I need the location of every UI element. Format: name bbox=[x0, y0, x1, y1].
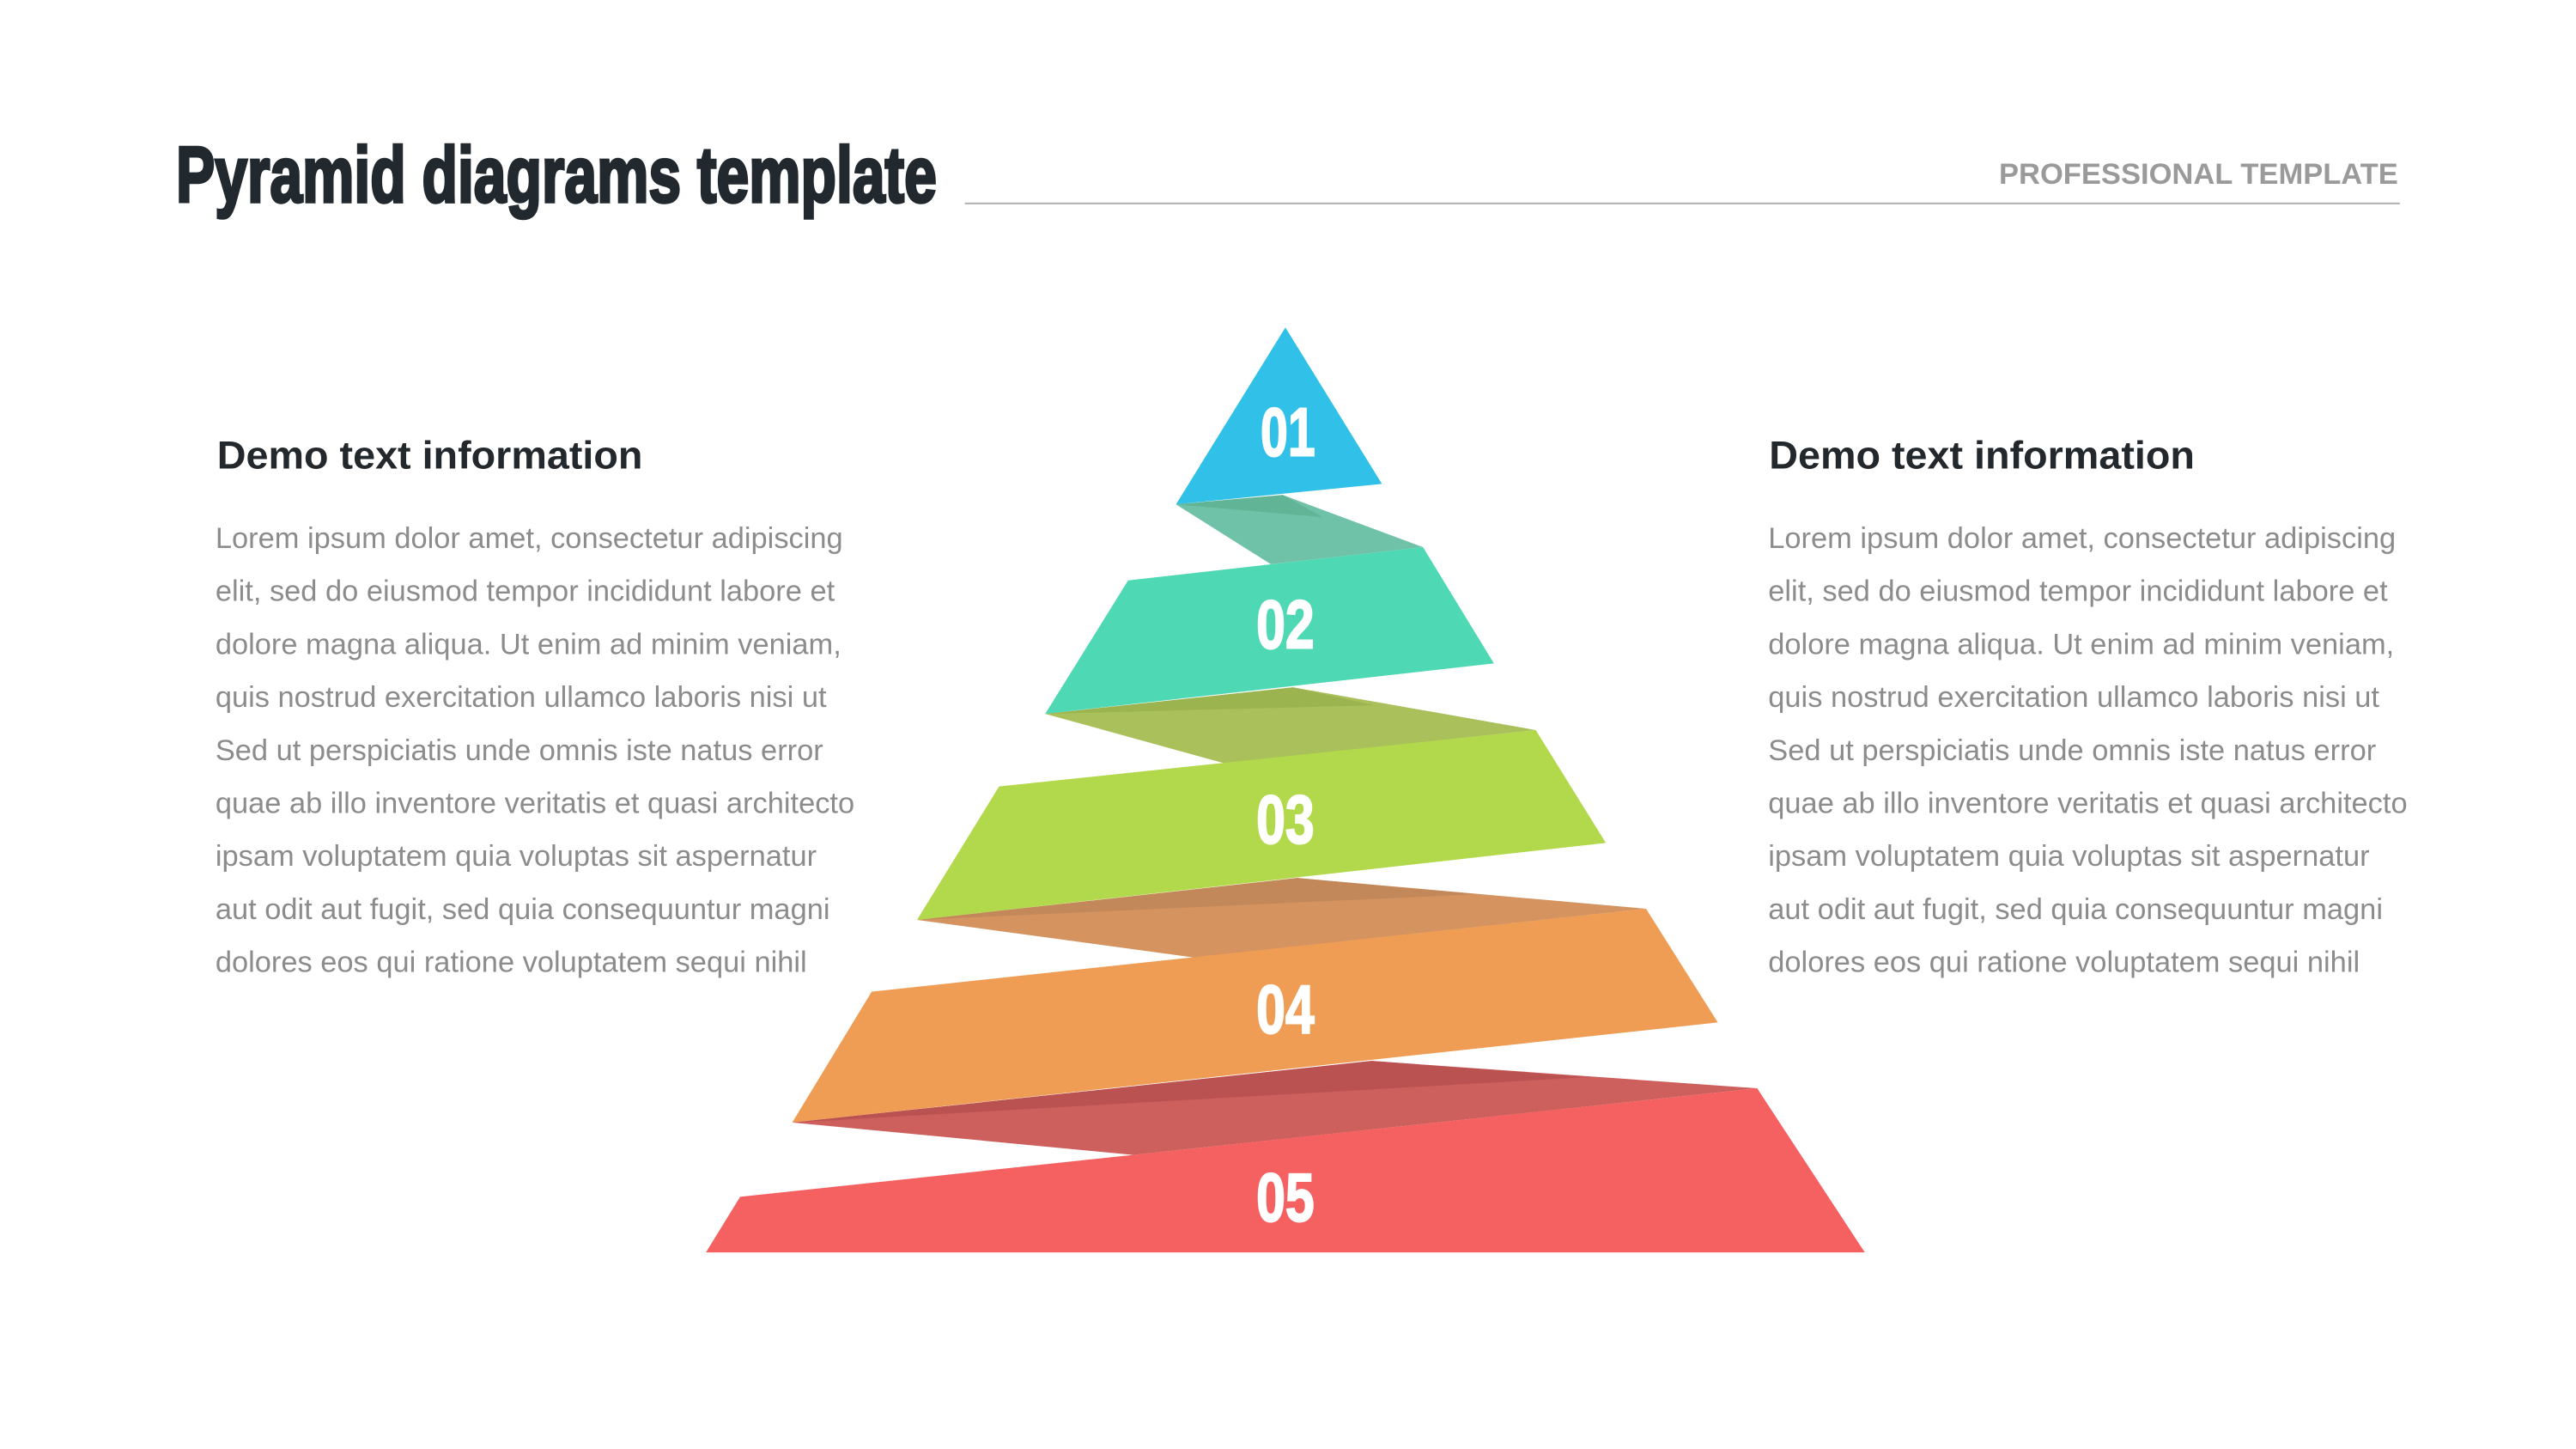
layer 02: 02 bbox=[1256, 586, 1315, 662]
right body text bbox=[1768, 522, 2408, 979]
panel: left text bbox=[216, 433, 854, 979]
title: Pyramid diagrams template bbox=[176, 131, 937, 219]
layer 03 bbox=[917, 730, 1606, 920]
layer 04: 04 bbox=[1256, 971, 1315, 1047]
layer 04 bbox=[793, 909, 1718, 1123]
right body text: quae ab illo inventore veritatis et quasi architecto bbox=[1768, 788, 2408, 820]
right body text: elit, sed do eiusmod tempor incididunt labore et bbox=[1768, 575, 2388, 608]
left body text: dolore magna aliqua. Ut enim ad minim veniam, bbox=[216, 628, 841, 661]
layer 01: 01 bbox=[1261, 393, 1315, 470]
panel: right text bbox=[1768, 433, 2408, 979]
pyramid diagram bbox=[706, 327, 1865, 1252]
left body text: elit, sed do eiusmod tempor incididunt labore et bbox=[216, 575, 835, 608]
right body text: aut odit aut fugit, sed quia consequuntur magni bbox=[1768, 893, 2383, 926]
left body text: Lorem ipsum dolor amet, consectetur adipiscing bbox=[216, 522, 843, 555]
left body text: quis nostrud exercitation ullamco laboris nisi ut bbox=[216, 681, 827, 714]
layer 05: 05 bbox=[1256, 1159, 1315, 1235]
right heading: Demo text information bbox=[1769, 433, 2195, 477]
fold 1-2 bbox=[1176, 495, 1423, 564]
layer 01 bbox=[1176, 327, 1382, 504]
left body text: quae ab illo inventore veritatis et quasi architecto bbox=[216, 788, 854, 820]
fold 3-4 bbox=[917, 878, 1646, 958]
fold 4-5 bbox=[793, 1061, 1757, 1155]
layer 05 bbox=[706, 1088, 1865, 1252]
left body text: ipsam voluptatem quia voluptas sit aspernatur bbox=[216, 840, 817, 873]
right body text: dolores eos qui ratione voluptatem sequi nihil bbox=[1768, 947, 2360, 979]
layer 03: 03 bbox=[1256, 781, 1315, 857]
left body text bbox=[216, 522, 854, 979]
right body text: Sed ut perspiciatis unde omnis iste natus error bbox=[1768, 734, 2376, 767]
left body text: dolores eos qui ratione voluptatem sequi nihil bbox=[216, 947, 807, 979]
left heading: Demo text information bbox=[217, 433, 642, 477]
right body text: ipsam voluptatem quia voluptas sit aspernatur bbox=[1768, 840, 2370, 873]
fold 2-3 bbox=[1045, 687, 1536, 764]
subtitle: PROFESSIONAL TEMPLATE bbox=[1999, 158, 2398, 191]
right body text: Lorem ipsum dolor amet, consectetur adipiscing bbox=[1768, 522, 2396, 555]
layer 02 bbox=[1045, 547, 1494, 714]
right body text: quis nostrud exercitation ullamco laboris nisi ut bbox=[1768, 681, 2379, 714]
left body text: aut odit aut fugit, sed quia consequuntur magni bbox=[216, 893, 830, 926]
left body text: Sed ut perspiciatis unde omnis iste natus error bbox=[216, 734, 823, 767]
right body text: dolore magna aliqua. Ut enim ad minim veniam, bbox=[1768, 628, 2394, 661]
